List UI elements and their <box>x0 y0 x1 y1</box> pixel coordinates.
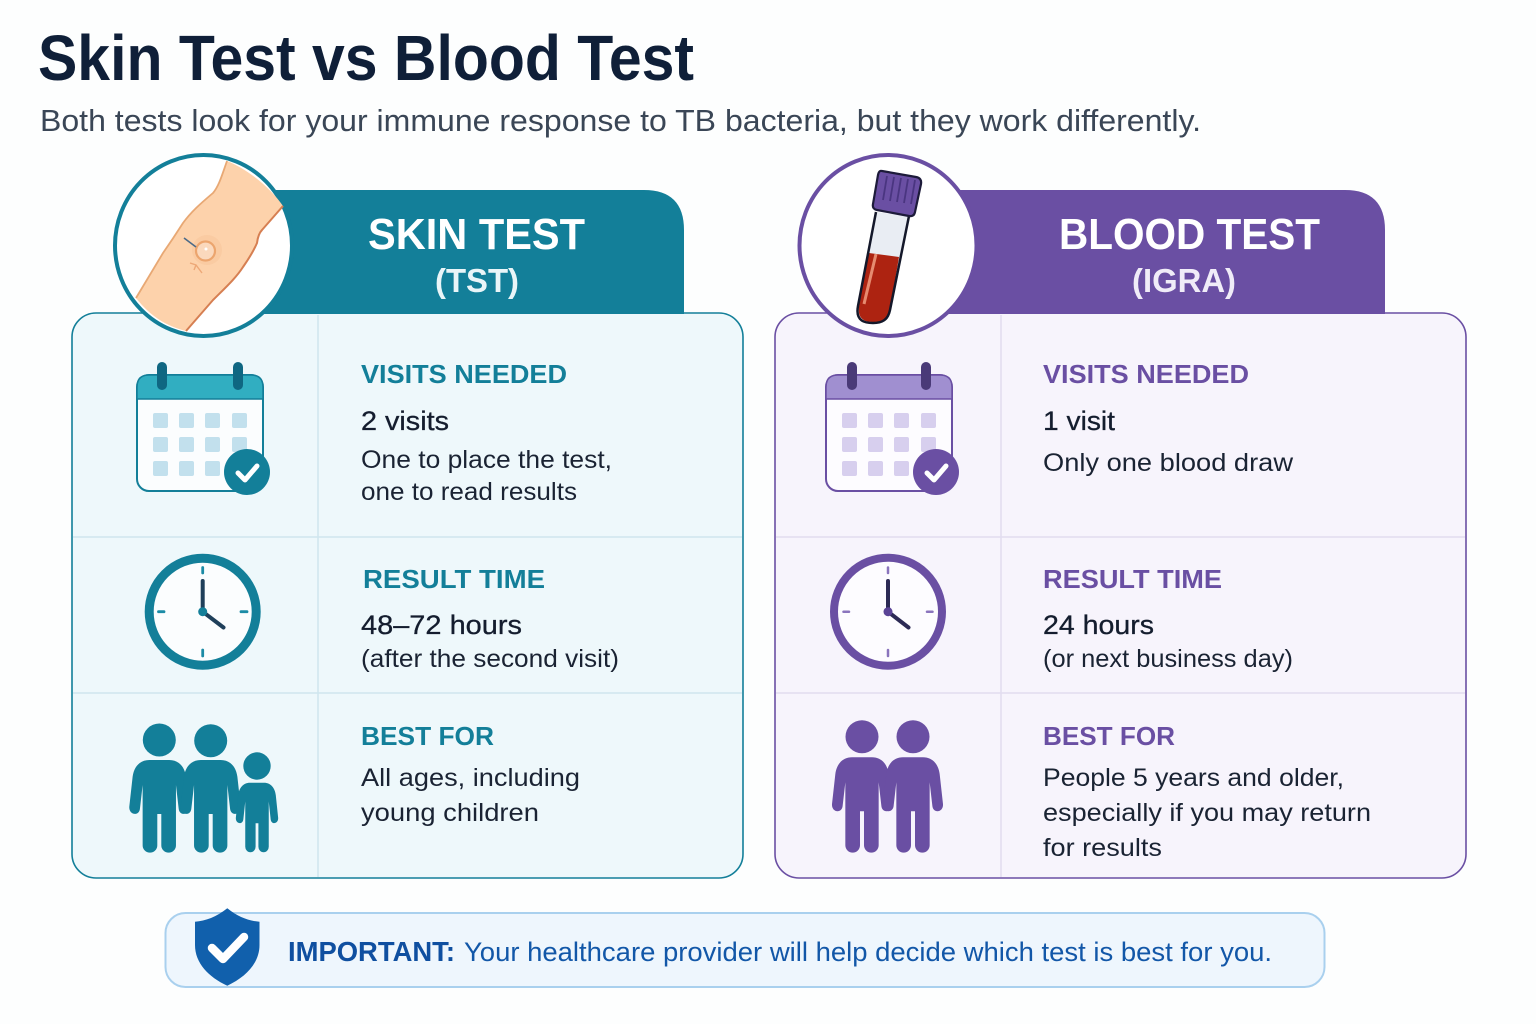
panel: blood test <box>775 155 1466 878</box>
skin test header band <box>260 190 684 314</box>
best for text: young children <box>361 799 539 827</box>
best for text: for results <box>1043 834 1162 862</box>
icon: arm with skin test <box>115 155 292 336</box>
best for text: People 5 years and older, <box>1043 764 1344 792</box>
blood test heading: BLOOD TEST <box>1059 210 1320 259</box>
visits needed text: VISITS NEEDED <box>361 359 567 389</box>
best for text: All ages, including <box>361 764 580 792</box>
result time text: 48–72 hours <box>361 610 522 640</box>
callout text: IMPORTANT: <box>288 936 455 967</box>
icon: clock <box>149 558 256 665</box>
visits needed text: 1 visit <box>1043 406 1116 436</box>
row: visits needed <box>826 359 1294 495</box>
visits needed text: one to read results <box>361 478 577 506</box>
blood test card background <box>775 313 1466 878</box>
row: visits needed <box>137 359 612 506</box>
result time text: RESULT TIME <box>1043 564 1222 594</box>
result time text: (or next business day) <box>1043 645 1293 673</box>
row: result time <box>149 558 619 673</box>
icon: calendar with check <box>137 362 270 495</box>
row: result time <box>834 558 1293 673</box>
visits needed text <box>361 359 612 506</box>
visits needed text: One to place the test, <box>361 446 612 474</box>
blood test header band <box>945 190 1385 314</box>
visits needed text <box>1043 359 1294 477</box>
visits needed text: Only one blood draw <box>1043 449 1294 477</box>
visits needed text: 2 visits <box>361 406 449 436</box>
icon: clock <box>834 558 942 666</box>
icon: blood tube <box>800 155 976 336</box>
callout text: Your healthcare provider will help decide which test is best for you. <box>464 937 1272 967</box>
result time text <box>1043 564 1293 673</box>
panel: skin test <box>72 155 743 878</box>
icon: calendar with check <box>826 362 959 495</box>
callout: important note <box>166 908 1324 987</box>
best for text: BEST FOR <box>1043 721 1175 751</box>
skin test card background <box>72 313 743 878</box>
best for text: especially if you may return <box>1043 799 1371 827</box>
result time text <box>361 564 619 673</box>
blood test abbreviation: (IGRA) <box>1132 262 1236 299</box>
subtitle: Both tests look for your immune response to TB bacteria, but they work differently. <box>40 103 1201 138</box>
row: best for <box>832 720 1371 862</box>
result time text: RESULT TIME <box>363 564 545 594</box>
icon: two people <box>832 720 943 853</box>
best for text <box>361 721 580 827</box>
icon: shield with check <box>195 908 260 986</box>
result time text: 24 hours <box>1043 610 1154 640</box>
row: best for <box>129 721 580 853</box>
skin test heading: SKIN TEST <box>368 210 585 259</box>
result time text: (after the second visit) <box>361 645 619 673</box>
skin test abbreviation: (TST) <box>435 262 519 299</box>
title: Skin Test vs Blood Test <box>38 22 694 94</box>
icon: family of three <box>129 724 278 853</box>
best for text: BEST FOR <box>361 721 494 751</box>
visits needed text: VISITS NEEDED <box>1043 359 1249 389</box>
best for text <box>1043 721 1371 862</box>
